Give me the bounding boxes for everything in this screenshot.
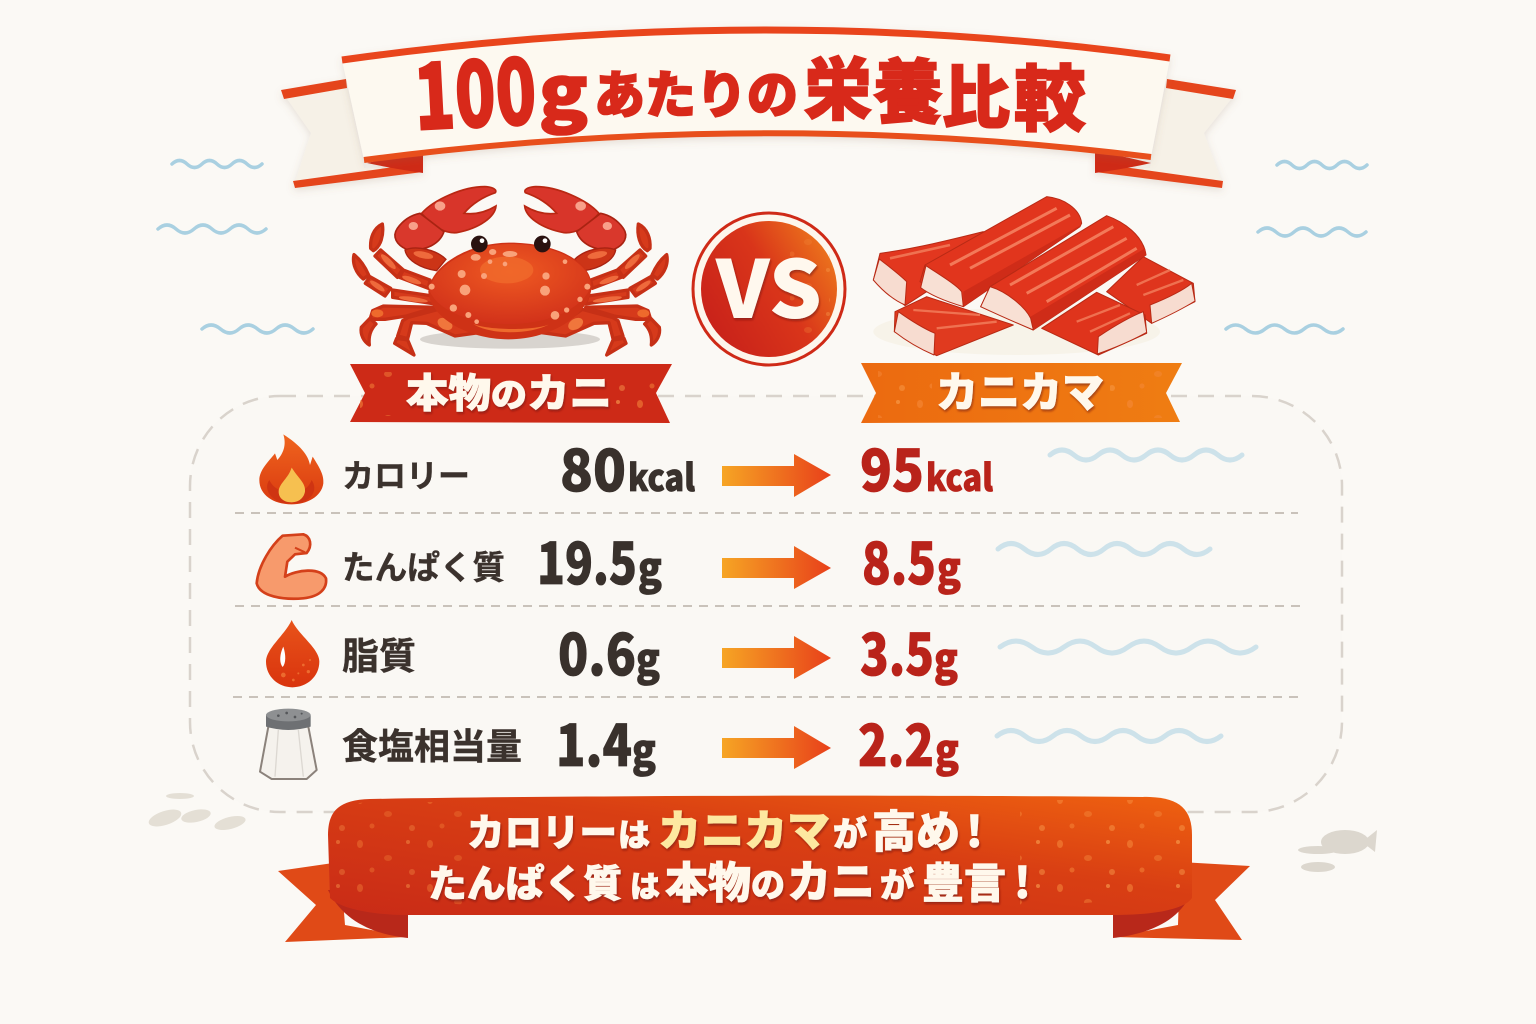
row: protein bbox=[257, 519, 961, 601]
row: fat: 0.6 bbox=[558, 610, 636, 692]
title: g bbox=[539, 34, 588, 139]
main title band bbox=[342, 29, 1170, 160]
row: fat: g bbox=[934, 624, 958, 688]
title: 比 bbox=[942, 43, 1010, 142]
left ribbon tail bbox=[281, 79, 423, 188]
title: あたりの bbox=[594, 54, 798, 128]
row: protein: 8.5 bbox=[862, 519, 936, 601]
summary line 1 bbox=[467, 796, 983, 860]
row: salt: 1.4 bbox=[556, 701, 632, 783]
row: salt bbox=[260, 701, 959, 783]
row: protein: g bbox=[638, 533, 662, 597]
summary line 1: ! bbox=[966, 799, 983, 860]
summary line 1: が bbox=[833, 807, 867, 856]
row: calories: カロリー bbox=[342, 451, 470, 497]
icon: salt shaker bbox=[260, 709, 317, 779]
ribbon speckles right bbox=[1020, 800, 1188, 908]
icon: oil drop bbox=[266, 620, 319, 687]
row: calories: kcal bbox=[926, 448, 993, 502]
title: 100 bbox=[411, 20, 539, 156]
crab body bbox=[428, 243, 592, 339]
title bbox=[411, 20, 1086, 156]
row: fat: g bbox=[636, 624, 660, 688]
sand marks left bbox=[147, 793, 247, 833]
stick right back bbox=[1107, 257, 1195, 323]
decorative waves upper right bbox=[1226, 162, 1367, 333]
row: protein: g bbox=[937, 533, 961, 597]
arrow bbox=[722, 636, 831, 679]
title: 養 bbox=[873, 37, 943, 138]
row: salt: 食塩相当量 bbox=[342, 718, 522, 770]
stick upper middle bbox=[920, 197, 1082, 307]
summary line 2: は bbox=[630, 862, 660, 906]
summary line 2: カニ bbox=[787, 846, 875, 910]
table background waves bbox=[997, 450, 1256, 742]
crab shadow bbox=[420, 330, 600, 349]
summary line 2: 本物 bbox=[665, 849, 751, 911]
row: salt: 2.2 bbox=[858, 701, 934, 783]
summary line 2 bbox=[428, 846, 1031, 911]
crab left claw and legs bbox=[353, 187, 496, 355]
summary line 2: たんぱく質 bbox=[428, 853, 622, 908]
label: crab stick: カニカマ bbox=[936, 359, 1104, 420]
ribbon body bbox=[328, 796, 1192, 915]
VS badge: VS bbox=[715, 226, 822, 342]
crab eyes bbox=[471, 236, 551, 252]
arrow bbox=[722, 726, 831, 769]
summary line 1: カニカマ bbox=[658, 797, 830, 859]
row: calories bbox=[259, 426, 993, 508]
stick lower right bbox=[1042, 292, 1147, 355]
row: fat: 3.5 bbox=[860, 610, 934, 692]
summary line 1: カロリー bbox=[467, 802, 617, 857]
crab stick illustration bbox=[873, 197, 1195, 356]
stick back left bbox=[873, 232, 990, 306]
summary line 2: の bbox=[751, 858, 785, 907]
row: calories: 80 bbox=[560, 426, 626, 508]
crab right claw and legs bbox=[525, 187, 667, 355]
fish and sand marks right bbox=[1298, 830, 1377, 872]
title: 栄 bbox=[804, 35, 872, 134]
right ribbon tail bbox=[1095, 79, 1236, 188]
summary line 1: は bbox=[618, 810, 650, 856]
icon: flame bbox=[259, 434, 323, 504]
stick lower left bbox=[894, 297, 1013, 356]
table panel bbox=[190, 396, 1342, 812]
ground tint bbox=[873, 308, 1160, 355]
row: calories: kcal bbox=[628, 448, 695, 502]
row: protein: たんぱく質 bbox=[342, 541, 505, 589]
row: protein: 19.5 bbox=[537, 519, 637, 601]
summary line 1: 高め bbox=[872, 796, 960, 860]
arrow bbox=[722, 546, 831, 589]
row: salt: g bbox=[632, 715, 656, 779]
label: real crab bbox=[350, 361, 672, 423]
row: fat: 脂質 bbox=[342, 626, 416, 680]
row: salt: g bbox=[935, 715, 959, 779]
label: crab stick bbox=[861, 359, 1182, 423]
title ribbon bbox=[281, 20, 1236, 188]
bottom ribbon bbox=[278, 796, 1250, 942]
decorative waves upper left bbox=[158, 160, 313, 333]
label: real crab: 本物のカニ bbox=[406, 361, 612, 419]
crab illustration bbox=[353, 187, 667, 355]
VS badge bbox=[693, 213, 845, 365]
summary line 2: 豊言 bbox=[922, 850, 1006, 911]
row dividers bbox=[233, 513, 1303, 697]
summary line 2: が bbox=[880, 858, 914, 907]
arrow bbox=[722, 454, 831, 497]
stick centre top bbox=[981, 216, 1146, 330]
icon: flexed arm bbox=[257, 534, 326, 599]
ribbon speckles left bbox=[332, 802, 470, 905]
summary line 2: ! bbox=[1014, 850, 1031, 911]
row: fat bbox=[266, 610, 958, 692]
title: 較 bbox=[1014, 41, 1086, 146]
ribbon right tail bbox=[1113, 862, 1250, 940]
ribbon left tail bbox=[278, 862, 408, 942]
row: calories: 95 bbox=[860, 426, 924, 508]
